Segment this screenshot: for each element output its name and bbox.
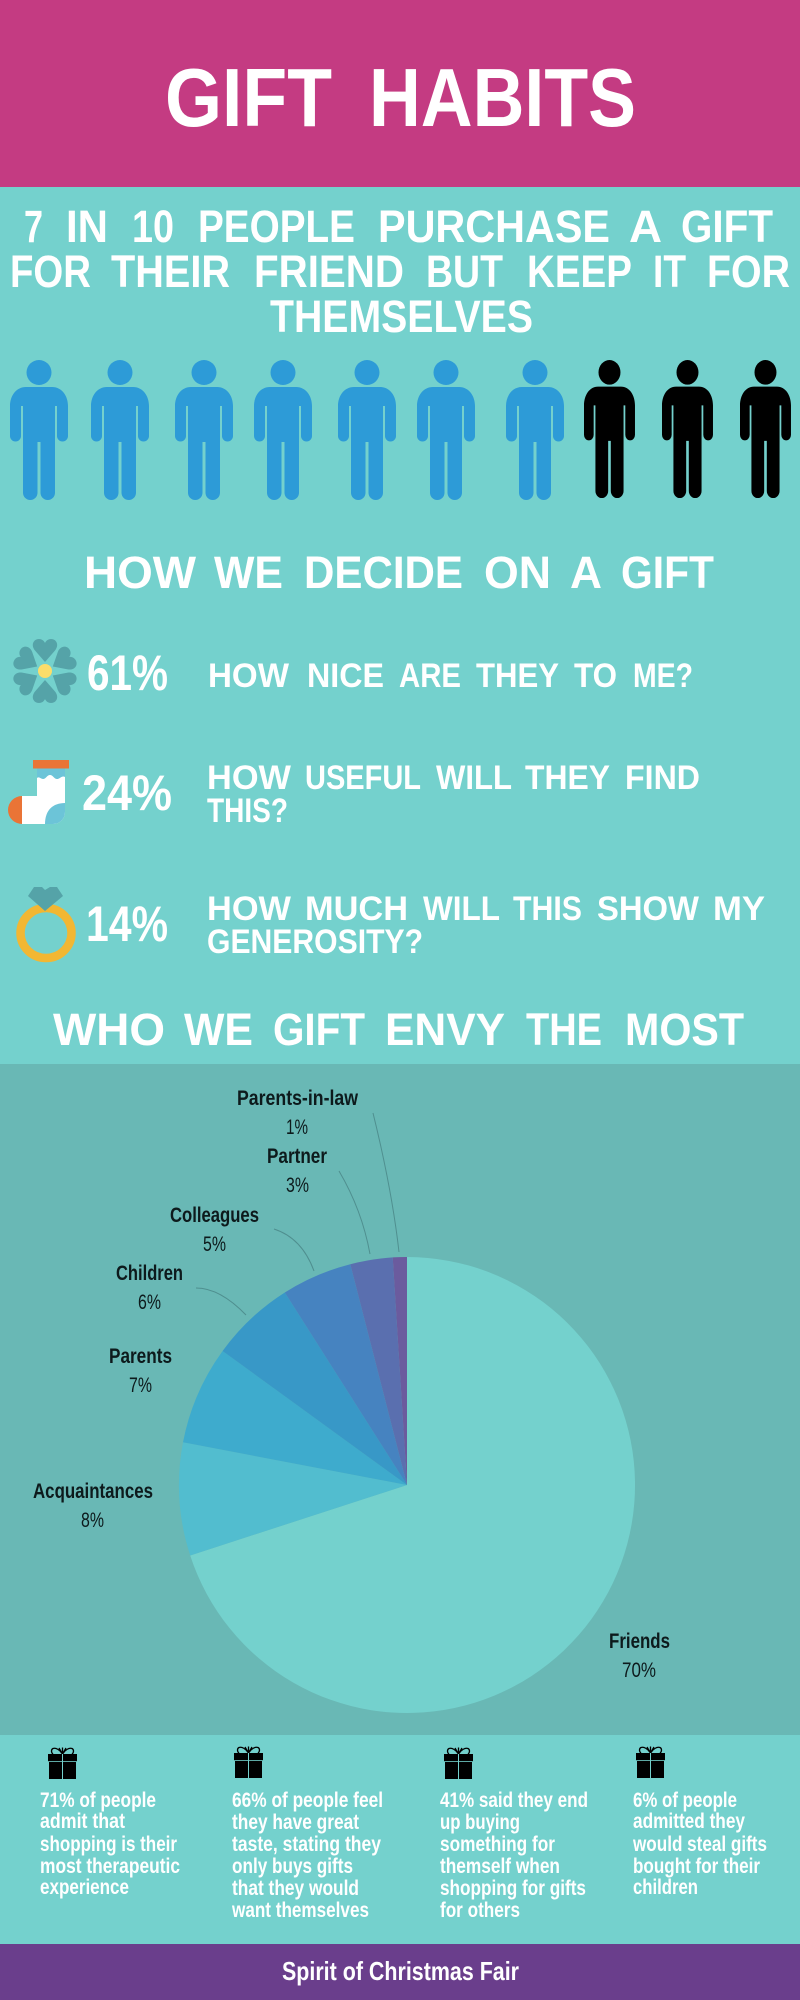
icon: 3 black people	[584, 360, 791, 498]
text: fact three	[440, 1789, 588, 1922]
label: parents-in-law: 1%	[286, 1116, 308, 1139]
heading: 7 in 10 statement: FRIEND	[254, 246, 404, 297]
label: children	[116, 1262, 183, 1314]
stat: 24%: 24%	[82, 765, 172, 821]
text: how nice: NICE	[307, 657, 384, 695]
heading: who we gift envy: WE	[184, 1004, 253, 1055]
leader lines	[196, 1113, 399, 1315]
heading: 7 in 10 statement: 10	[132, 201, 174, 252]
text: fact two: taste, stating they	[232, 1833, 381, 1856]
text: fact four: bought for their	[633, 1855, 760, 1878]
label: parents-in-law: Parents-in-law	[237, 1087, 359, 1110]
heading: 7 in 10 statement	[10, 201, 790, 342]
text: fact two: 66% of people feel	[232, 1789, 383, 1812]
text: fact four: would steal gifts	[632, 1833, 767, 1856]
text: how nice: TO	[574, 657, 617, 695]
chart: pie slices	[179, 1257, 635, 1713]
text: how much: MY	[713, 890, 765, 928]
column: 6 percent fact	[632, 1746, 767, 1899]
text: fact two: that they would	[232, 1877, 359, 1900]
panel: footer	[0, 1944, 800, 2000]
heading: 7 in 10 statement: IN	[66, 201, 108, 252]
panel: header banner	[0, 0, 800, 187]
label: parents-in-law	[237, 1087, 359, 1139]
heading: 7 in 10 statement: THEMSELVES	[270, 291, 533, 342]
text: how nice	[208, 657, 693, 695]
pictogram: 7 of 10 people	[10, 360, 791, 500]
text: how useful	[207, 759, 700, 830]
stat: 61%: 61%	[87, 645, 168, 701]
stat: 14%: 14%	[86, 896, 168, 952]
icon: sock	[8, 760, 69, 824]
text: fact three: 41% said they end	[440, 1789, 588, 1812]
icon: gift	[636, 1746, 665, 1778]
heading: 7 in 10 statement: IT	[653, 246, 686, 297]
text: fact three: for others	[440, 1899, 520, 1922]
icon: gift	[234, 1746, 263, 1778]
text: how much: MUCH	[305, 890, 408, 928]
text: how much: HOW	[207, 890, 292, 928]
text: how nice: ME?	[633, 657, 693, 695]
text: fact four: children	[633, 1876, 698, 1899]
label: acquaintances: Acquaintances	[33, 1480, 153, 1503]
heading: who we gift envy	[53, 1004, 744, 1055]
column: 41 percent fact	[440, 1748, 588, 1922]
text: how much	[207, 890, 765, 961]
text: how useful: USEFUL	[305, 759, 421, 797]
icon: ring	[20, 887, 72, 958]
label: children: Children	[116, 1262, 183, 1285]
text: how much: SHOW	[597, 890, 700, 928]
label: acquaintances	[33, 1480, 153, 1532]
text: fact three: up buying	[440, 1811, 520, 1834]
heading: 7 in 10 statement: PURCHASE	[378, 201, 610, 252]
text: fact three: themself when	[440, 1855, 560, 1878]
text: fact one	[40, 1789, 180, 1899]
text: fact four: 6% of people	[633, 1789, 737, 1812]
panel: pie chart	[0, 1064, 800, 1735]
label: partner	[267, 1145, 327, 1197]
text: fact four: admitted they	[633, 1810, 745, 1833]
heading: who we gift envy: MOST	[625, 1004, 744, 1055]
row: 61 percent	[11, 639, 693, 703]
heading: 7 in 10 statement: PEOPLE	[198, 201, 355, 252]
text: fact one: admit that	[40, 1810, 125, 1833]
text: how nice: HOW	[208, 657, 290, 695]
text: how much: THIS	[513, 890, 582, 928]
text: fact one: shopping is their	[40, 1833, 177, 1856]
footer text: Spirit of Christmas Fair	[282, 1956, 519, 1986]
title	[165, 51, 636, 144]
text: how much: GENEROSITY?	[207, 923, 423, 961]
label: parents: Parents	[109, 1345, 172, 1368]
text: how useful: HOW	[207, 759, 292, 797]
text: how nice: THEY	[476, 657, 559, 695]
icon: gift	[444, 1748, 473, 1779]
text: how much: WILL	[423, 890, 500, 928]
text: fact one: 71% of people	[40, 1789, 156, 1812]
text: fact two: only buys gifts	[232, 1855, 353, 1878]
heading: 7 in 10 statement: GIFT	[681, 201, 773, 252]
text: how useful: THEY	[525, 759, 610, 797]
heading: 7 in 10 statement: A	[629, 201, 662, 252]
heading: 7 in 10 statement: 7	[24, 201, 43, 252]
text: fact three: shopping for gifts	[440, 1877, 586, 1900]
title: HABITS	[369, 51, 636, 144]
label: friends	[609, 1630, 670, 1682]
heading: how we decide: DECIDE	[304, 547, 463, 598]
heading: 7 in 10 statement: KEEP	[527, 246, 632, 297]
heading: 7 in 10 statement: FOR	[10, 246, 91, 297]
label: partner: Partner	[267, 1145, 327, 1168]
label: parents: 7%	[129, 1374, 152, 1397]
icon: gift	[48, 1748, 77, 1779]
heading: 7 in 10 statement: FOR	[707, 246, 790, 297]
heading: 7 in 10 statement: BUT	[426, 246, 503, 297]
heading: how we decide: WE	[214, 547, 283, 598]
label: colleagues: Colleagues	[170, 1204, 259, 1227]
text: fact three: something for	[440, 1833, 555, 1856]
label: partner: 3%	[286, 1174, 309, 1197]
text: fact four	[632, 1789, 767, 1899]
text: fact two	[231, 1789, 383, 1922]
label: colleagues	[170, 1204, 259, 1256]
column: 71 percent fact	[40, 1748, 180, 1899]
row: 24 percent	[8, 759, 700, 830]
heading: who we gift envy: ENVY	[385, 1004, 505, 1055]
text: how useful: WILL	[436, 759, 512, 797]
label: friends: 70%	[622, 1659, 656, 1682]
heading: how we decide: GIFT	[621, 547, 714, 598]
label: acquaintances: 8%	[81, 1509, 104, 1532]
label: parents	[109, 1345, 172, 1397]
text: fact one: most therapeutic	[40, 1855, 180, 1878]
icon: flower	[11, 639, 79, 703]
column: 66 percent fact	[231, 1746, 383, 1922]
heading: how we decide	[84, 547, 714, 598]
heading: how we decide: HOW	[84, 547, 197, 598]
heading: how we decide: ON	[484, 547, 551, 598]
heading: who we gift envy: WHO	[53, 1004, 165, 1055]
label: children: 6%	[138, 1291, 161, 1314]
text: how useful: THIS?	[207, 792, 288, 830]
text: how useful: FIND	[625, 759, 700, 797]
icon: 7 blue people	[10, 360, 564, 500]
heading: who we gift envy: GIFT	[273, 1004, 365, 1055]
heading: 7 in 10 statement: THEIR	[111, 246, 230, 297]
label: colleagues: 5%	[203, 1233, 226, 1256]
row: 14 percent	[20, 887, 765, 961]
text: fact two: want themselves	[231, 1899, 369, 1922]
label: friends: Friends	[609, 1630, 670, 1653]
text: how nice: ARE	[399, 657, 461, 695]
heading: who we gift envy: THE	[526, 1004, 602, 1055]
text: fact one: experience	[40, 1876, 129, 1899]
title: GIFT	[165, 51, 332, 144]
heading: how we decide: A	[570, 547, 602, 598]
text: fact two: they have great	[232, 1811, 359, 1834]
